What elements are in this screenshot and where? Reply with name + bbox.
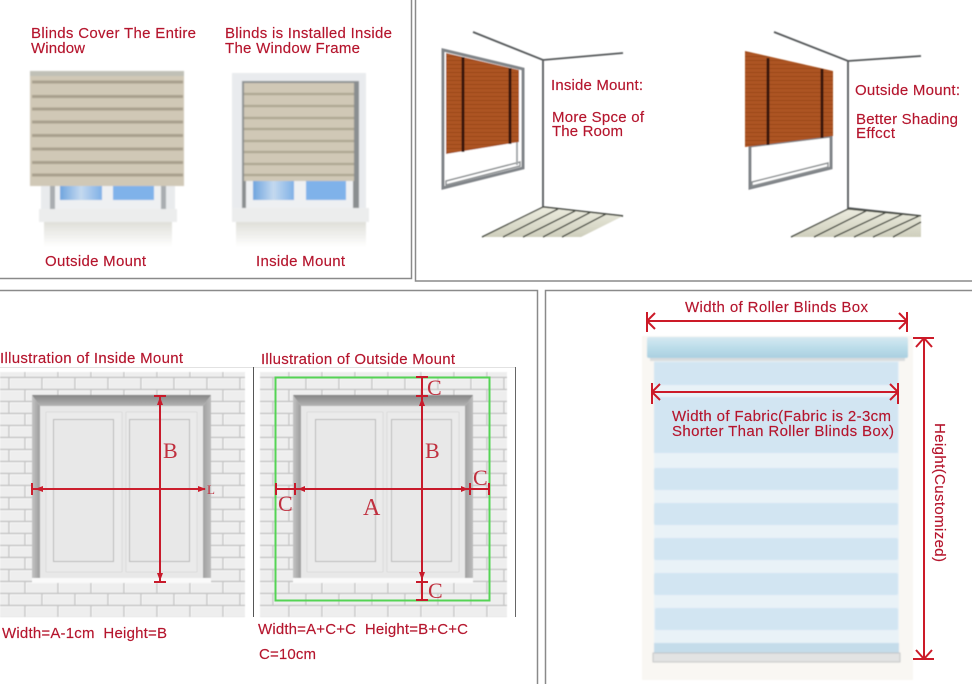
panel: room sketches	[416, 0, 972, 281]
label: fabric width: Width of Fabric(Fabric is 2-3cm	[672, 408, 891, 425]
arrow: height	[913, 338, 934, 659]
label: fabric width	[672, 408, 894, 440]
text: inside mount benefit: Inside Mount:	[551, 77, 643, 94]
photo: blue zebra roller blind	[642, 336, 913, 680]
label: bottom C: C	[428, 578, 443, 603]
heading: inside mount illustration: Illustration of Inside Mount	[0, 350, 184, 367]
diagram: outside mount window	[260, 372, 507, 617]
text: outside mount benefit: Effcct	[856, 125, 896, 142]
photo: outside mount window	[30, 71, 184, 247]
measure: height arrow B	[416, 377, 440, 600]
heading: inside frame note: The Window Frame	[225, 40, 360, 57]
panel: mount comparison photos	[0, 0, 412, 278]
text: inside mount benefit: The Room	[552, 123, 623, 140]
label: fabric width: Shorter Than Roller Blinds Box)	[672, 423, 894, 440]
heading: outside mount illustration: Illustration of Outside Mount	[261, 351, 456, 368]
label: height: Height(Customized)	[931, 423, 948, 562]
text: inside mount benefit: More Spce of	[552, 109, 645, 126]
photo: inside mount window	[232, 73, 369, 247]
arrow: fabric width	[652, 383, 898, 404]
caption: inside mount: Inside Mount	[256, 253, 346, 270]
measure: width arrow: L	[207, 482, 215, 497]
measure: width arrow A	[276, 483, 489, 521]
measure: width arrow A: A	[363, 495, 381, 521]
formula: inside mount: Width=A-1cm Height=B	[2, 625, 167, 642]
formula: outside mount	[258, 621, 468, 663]
formula: outside mount: C=10cm	[259, 646, 316, 663]
sketch: inside mount room	[443, 32, 623, 237]
heading: inside frame note: Blinds is Installed Inside	[225, 25, 392, 42]
arrow: box width	[647, 312, 907, 332]
sketch: outside mount room	[745, 32, 921, 237]
label: top C: C	[427, 375, 442, 400]
text: outside mount benefit: Outside Mount:	[855, 82, 960, 99]
measure: green outline	[276, 378, 490, 600]
label: left C: C	[278, 491, 293, 516]
text: outside mount benefit	[855, 82, 960, 142]
panel: roller blinds dimensions	[546, 290, 972, 684]
label: box width: Width of Roller Blinds Box	[685, 299, 868, 316]
measure: height arrow B: B	[425, 438, 440, 463]
formula: outside mount: Width=A+C+C Height=B+C+C	[258, 621, 468, 638]
caption: outside mount: Outside Mount	[45, 253, 147, 270]
heading: inside frame note	[225, 25, 392, 57]
label: right C: C	[473, 465, 488, 490]
measure: height arrow B	[154, 396, 178, 582]
heading: outside cover note: Blinds Cover The Entire	[31, 25, 196, 42]
heading: outside cover note	[31, 25, 196, 57]
text: outside mount benefit: Better Shading	[856, 111, 958, 128]
panel: measurement illustrations	[0, 290, 538, 684]
text: inside mount benefit	[551, 77, 645, 140]
measure: width arrow	[32, 482, 215, 497]
diagram: inside mount window	[0, 372, 245, 617]
heading: outside cover note: Window	[31, 40, 85, 57]
measure: height arrow B: B	[163, 438, 178, 463]
